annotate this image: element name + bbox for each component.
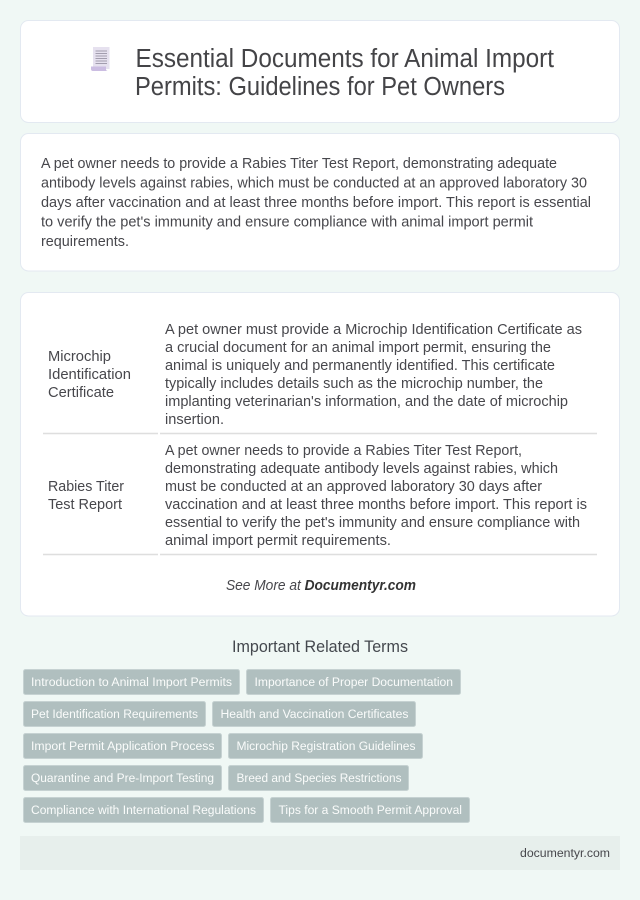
intro paragraph: A pet owner needs to provide a Rabies Titer Test Report, demonstrating adequate: [41, 156, 557, 172]
chip: [24, 670, 240, 694]
chip: [270, 798, 470, 822]
chip: [24, 702, 206, 726]
row text: Rabies Titer Test Report: demonstrating adequate antibody levels against rabies, which: [165, 461, 558, 477]
row label: Microchip Identification Certificate: Identification: [48, 367, 131, 383]
term chips: [24, 670, 470, 822]
panel: intro summary: [20, 134, 620, 271]
intro paragraph: antibody levels against rabies, which must be conducted at an approved laboratory 30: [41, 176, 587, 192]
chip: Microchip Registration Guidelines: [236, 739, 416, 753]
row text: Microchip Identification Certificate: a crucial document for an animal import permit, ensuring the: [165, 340, 551, 356]
row text: Microchip Identification Certificate: typically includes details such as the microchip number, the: [165, 376, 543, 392]
row text: Rabies Titer Test Report: vaccination and at least three months before import. This report is: [165, 497, 587, 513]
chip: [246, 670, 460, 694]
row label: Microchip Identification Certificate: [48, 349, 131, 401]
see more link: See More at Documentyr.com: [226, 578, 416, 594]
heading: important related terms: Important Related Terms: [232, 638, 408, 656]
intro paragraph: days after vaccination and at least three months before import. This report is essential: [41, 195, 591, 211]
chip: Introduction to Animal Import Permits: [31, 675, 232, 689]
chip: [228, 766, 408, 790]
icon: document scroll: [91, 47, 110, 71]
footer bar: documentyr.com: [520, 846, 610, 860]
chip: [24, 734, 222, 758]
chip: Import Permit Application Process: [31, 739, 214, 753]
chip: Health and Vaccination Certificates: [220, 707, 408, 721]
row label: Rabies Titer Test Report: Test Report: [48, 497, 122, 513]
chip: Compliance with International Regulations: [31, 803, 256, 817]
row label: Rabies Titer Test Report: [48, 479, 124, 513]
row text: Rabies Titer Test Report: essential to verify the pet's immunity and ensure compliance with: [165, 515, 580, 531]
chip: [24, 798, 264, 822]
row text: Rabies Titer Test Report: A pet owner needs to provide a Rabies Titer Test Report,: [165, 443, 522, 459]
panel: documents table: [20, 292, 620, 616]
chip: Breed and Species Restrictions: [236, 771, 402, 785]
panel: title card: [20, 20, 620, 122]
title text: [135, 45, 554, 101]
row label: Rabies Titer Test Report: Rabies Titer: [48, 479, 124, 495]
footer bar: [20, 836, 620, 870]
row text: Rabies Titer Test Report: [165, 443, 587, 549]
chip: Importance of Proper Documentation: [254, 675, 453, 689]
title text: Permits: Guidelines for Pet Owners: [135, 73, 505, 101]
row text: Rabies Titer Test Report: animal import permit requirements.: [165, 533, 391, 549]
chip: [212, 702, 416, 726]
intro paragraph: [41, 156, 591, 250]
row text: Rabies Titer Test Report: must be conducted at an approved laboratory 30 days after: [165, 479, 542, 495]
row text: Microchip Identification Certificate: [165, 322, 582, 428]
row label: Microchip Identification Certificate: Microchip: [48, 349, 111, 365]
row text: Microchip Identification Certificate: implanting veterinarian's information, and the date of microchip: [165, 394, 568, 410]
chip: Quarantine and Pre-Import Testing: [31, 771, 214, 785]
row text: Microchip Identification Certificate: insertion.: [165, 412, 224, 428]
title text: Essential Documents for Animal Import: [136, 45, 554, 73]
intro paragraph: to verify the pet's immunity and ensure compliance with animal import permit: [41, 214, 533, 230]
intro paragraph: requirements.: [41, 234, 129, 250]
chip: Tips for a Smooth Permit Approval: [278, 803, 462, 817]
row text: Microchip Identification Certificate: A pet owner must provide a Microchip Identification Certificate as: [165, 322, 582, 338]
chip: [24, 766, 222, 790]
row text: Microchip Identification Certificate: animal is uniquely and permanently identified. This certificate: [165, 358, 555, 374]
chip: Pet Identification Requirements: [31, 707, 198, 721]
row label: Microchip Identification Certificate: Certificate: [48, 385, 114, 401]
chip: [228, 734, 422, 758]
